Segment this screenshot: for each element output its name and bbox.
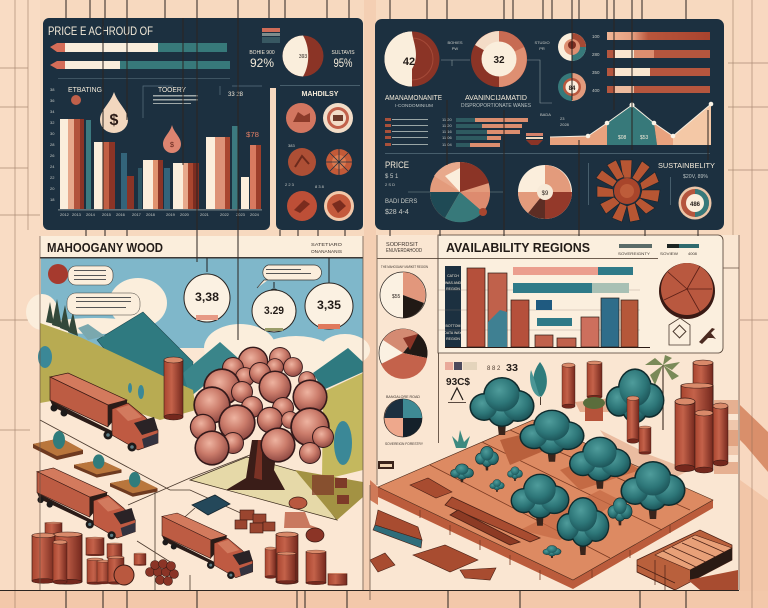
pie 2 (379, 329, 428, 379)
stat: 93C$ (446, 376, 470, 403)
y axis labels: 38 (50, 87, 55, 92)
leaf plant (530, 362, 547, 405)
log end slice (114, 565, 134, 585)
panel: availability charts: 2028 (560, 122, 570, 127)
label column: REGION (446, 337, 460, 341)
legend: 4008 (688, 251, 698, 256)
small labels: PR (539, 46, 545, 51)
small labels (447, 40, 550, 51)
headings: I-CONDOMINIUM (395, 103, 433, 108)
shrubs (450, 430, 561, 558)
chart panel (438, 235, 723, 353)
y axis labels (50, 87, 55, 202)
pie: price (430, 162, 490, 222)
lumber on platform (445, 497, 540, 545)
pie: 42: 42 (403, 56, 415, 68)
pie 3 (384, 395, 424, 446)
small labels: BOHIES (447, 40, 463, 45)
legend: SOVIEW (660, 251, 678, 256)
small labels: STUDIO (534, 40, 550, 45)
row list: 11 20 (442, 123, 452, 128)
y axis labels: 26 (50, 153, 55, 158)
stat: 92%: 92% (250, 56, 274, 70)
truck 1 (50, 373, 158, 452)
x axis labels: 2019 (166, 212, 176, 217)
label: estimating: ETBATING (68, 87, 102, 94)
mini bars icon (262, 28, 280, 43)
bar value label: $78 (246, 132, 259, 139)
wood blocks (235, 510, 275, 533)
small box (378, 461, 394, 469)
stat: 93C$: 93C$ (446, 376, 470, 388)
y axis labels: 28 (50, 142, 55, 147)
stat: 95% (331, 50, 355, 70)
y axis labels: 20 (50, 186, 55, 191)
icon: small drop: $ (170, 142, 174, 149)
stat: 95%: 95% (334, 56, 353, 70)
heading: sustainability (658, 161, 715, 180)
legend: SOVEREIGNTY (618, 251, 650, 256)
swatches and labels: 33 (506, 363, 518, 374)
mountains (78, 312, 363, 400)
road lines (40, 420, 250, 590)
left column: SODFRDSIT (386, 242, 418, 248)
headings (385, 95, 532, 109)
truck 2 (37, 468, 135, 539)
tall log (164, 357, 183, 420)
x axis labels: 2015 (102, 212, 112, 217)
pie: 42 (384, 32, 440, 86)
truck 3 (162, 513, 253, 579)
stat: 95%: SULTAVIS (331, 50, 355, 56)
panel: mahogany wood scene (26, 236, 370, 590)
legend (618, 244, 699, 256)
progress bar 2 (50, 61, 230, 69)
panel: availability charts: BADA (540, 112, 551, 117)
log pile left (32, 522, 146, 584)
pie 1 (380, 272, 426, 318)
icon: small drop (163, 125, 181, 153)
icon: plane (699, 328, 716, 344)
donut: 486 (678, 186, 712, 220)
y axis labels: 18 (50, 197, 55, 202)
x axis labels: 2018 (146, 212, 156, 217)
y axis labels: 32 (50, 120, 55, 125)
row list: 11 06 (442, 135, 452, 140)
donut: 32 (471, 31, 527, 87)
price details: $ 5 1 (385, 174, 399, 180)
x axis labels: 2012 (60, 212, 70, 217)
area chart (550, 102, 713, 145)
pie 3: BANGALORE ROAD (386, 395, 420, 399)
forest (46, 299, 78, 336)
panel: availability regions scene (370, 235, 739, 590)
small labels (285, 143, 325, 189)
label: today: TOOERY (158, 87, 186, 94)
y axis labels: 30 (50, 131, 55, 136)
heading: price: PRICE (385, 160, 409, 170)
left column (377, 242, 438, 469)
small wood pieces (370, 478, 496, 580)
medallion 1 (286, 103, 316, 133)
small labels: 2 2 3 (285, 182, 295, 187)
teal trees (469, 368, 686, 555)
x axis labels: 2024 (250, 212, 260, 217)
divider (437, 353, 440, 443)
row list: 11 16 (442, 129, 452, 134)
sapling platforms (33, 431, 158, 497)
ground scrub (312, 475, 349, 504)
horizontal bars (513, 267, 633, 326)
horizontal bar chart: 400 (592, 88, 600, 93)
logs back (562, 361, 602, 408)
pie: 59: $9 (542, 191, 549, 197)
horizontal bar chart: 100 (592, 34, 600, 39)
x axis labels: 2021 (200, 212, 210, 217)
y axis labels: 22 (50, 175, 55, 180)
x axis labels: 2022 (220, 212, 230, 217)
panel: availability charts: 23 (560, 116, 565, 121)
callout 3 (257, 265, 322, 288)
medallion 5 (287, 191, 317, 221)
sky (41, 258, 363, 348)
rock (306, 528, 324, 542)
label column: DATA WAY (444, 331, 462, 335)
tag icon (669, 318, 690, 345)
label: today (153, 87, 198, 104)
small labels: PW (452, 46, 458, 51)
headings: AVANINCIJAMATID (465, 95, 527, 102)
label column: WAS AND (445, 281, 461, 285)
x axis labels: 2014 (86, 212, 96, 217)
area chart: $08 (618, 135, 627, 141)
heading: sustainability: $20V, 89% (683, 174, 708, 180)
log cluster right (675, 360, 728, 473)
row list: 11 20 (442, 117, 452, 122)
label column: BOTTOM (446, 324, 461, 328)
left column: ENUVERDAHOOD (386, 248, 422, 254)
icon: dollar drop: $ (110, 112, 119, 129)
teal trees small (128, 383, 352, 465)
horizontal bar chart (592, 32, 710, 93)
y axis labels: 24 (50, 164, 55, 169)
heading: price: PRICE E ACHROUD OF (48, 24, 153, 38)
small label: 33 28 (228, 92, 244, 98)
grid (438, 290, 640, 330)
subtitle: SATETIARO (311, 242, 343, 247)
price tag 3,38 (184, 258, 230, 322)
title: availability regions: AVAILABILITY REGIONS (446, 240, 590, 255)
label column: CATCH (447, 274, 459, 278)
donut: 486: 486 (690, 202, 701, 208)
pile of small logs (146, 560, 178, 586)
price tag 3,38: 3,38 (195, 290, 219, 304)
price tag 3,35 (305, 258, 353, 329)
donut: 84: 84 (569, 86, 576, 92)
shadows behind logs (575, 395, 738, 480)
pie: wood slice (659, 263, 715, 319)
x axis labels: 2017 (132, 212, 142, 217)
x axis labels (60, 212, 260, 217)
header bar (40, 236, 363, 258)
small labels: 8 3 8 (315, 184, 325, 189)
left column: THE MAHOGANY MARKET REGION (381, 265, 428, 269)
horizontal bar chart: 350 (592, 70, 600, 75)
platform shadow band (370, 480, 378, 505)
donut: 84 (558, 73, 586, 101)
pie: 59 (518, 165, 572, 219)
label column: REGION (446, 287, 460, 291)
price tag 3.29: 3.29 (264, 305, 284, 317)
donut: small 1 (558, 33, 586, 61)
medallion 6 (324, 191, 354, 221)
horizontal bar chart: 280 (592, 52, 600, 57)
connector (441, 60, 552, 103)
icon: dollar drop (100, 92, 128, 133)
price details: BADI DERS (385, 199, 417, 205)
y axis labels: 36 (50, 98, 55, 103)
swatches and labels (445, 362, 518, 374)
logs mid (627, 396, 651, 454)
stat: 92% (249, 50, 275, 70)
subtitle (311, 242, 343, 254)
subtitle: ONANANANIS (311, 249, 342, 254)
panel: availability charts (375, 19, 724, 230)
callout 2 (67, 293, 140, 315)
price details: $28 4-4 (385, 209, 409, 216)
bars (467, 268, 638, 347)
small labels: 383 (288, 143, 295, 148)
x axis labels: 2023 (236, 212, 246, 217)
swatches and labels: 8 8 2 (487, 366, 501, 372)
heading: sustainability: SUSTAINBELITY (658, 161, 715, 170)
palm (645, 355, 680, 430)
tablet (192, 495, 230, 515)
platform: plantation (378, 420, 713, 589)
price tag 3,35: 3,35 (317, 300, 342, 312)
heading: mahogany side panel: MAHDILSY (302, 89, 338, 98)
headings: AMANAMONANITE (385, 95, 442, 102)
y axis labels: 34 (50, 109, 55, 114)
icon: wood starburst (596, 160, 660, 222)
mini stack icon (526, 133, 543, 145)
bar chart (58, 119, 262, 210)
donut: 32: 32 (493, 55, 505, 66)
area chart: $53 (640, 135, 649, 141)
medallion 4: sunburst (326, 149, 352, 175)
clouds (26, 278, 370, 376)
x axis labels: 2016 (116, 212, 126, 217)
log pile right (265, 532, 347, 586)
pie 3: SOVEREIGN FORESTRY (385, 442, 424, 446)
pie chart (282, 36, 324, 76)
row list (385, 117, 528, 147)
stat: 92%: BOHIE 900 (249, 50, 275, 56)
x axis labels: 2020 (180, 212, 190, 217)
lumber stack (637, 530, 738, 590)
stump (284, 497, 318, 528)
medallion 3 (288, 148, 316, 176)
bush (38, 346, 52, 368)
hills (40, 323, 363, 520)
price details (385, 174, 417, 216)
title: mahogany wood: MAHOOGANY WOOD (47, 240, 163, 255)
headings: DISPROPORTIONATE WANES (461, 103, 532, 109)
row list: 11 04 (442, 142, 452, 147)
progress bar 1 (50, 43, 227, 52)
label column (444, 266, 462, 347)
pie 1: $55 (392, 294, 401, 300)
panel: price breakdown (43, 18, 363, 230)
price tag 3.29 (252, 282, 296, 332)
price details: 2 S D (385, 182, 395, 187)
x axis labels: 2013 (72, 212, 82, 217)
callouts (48, 264, 113, 285)
pie chart: 393 (299, 54, 307, 60)
medallion 2 (323, 103, 353, 133)
tree: mahogany (190, 347, 334, 490)
potted plant (583, 397, 605, 421)
